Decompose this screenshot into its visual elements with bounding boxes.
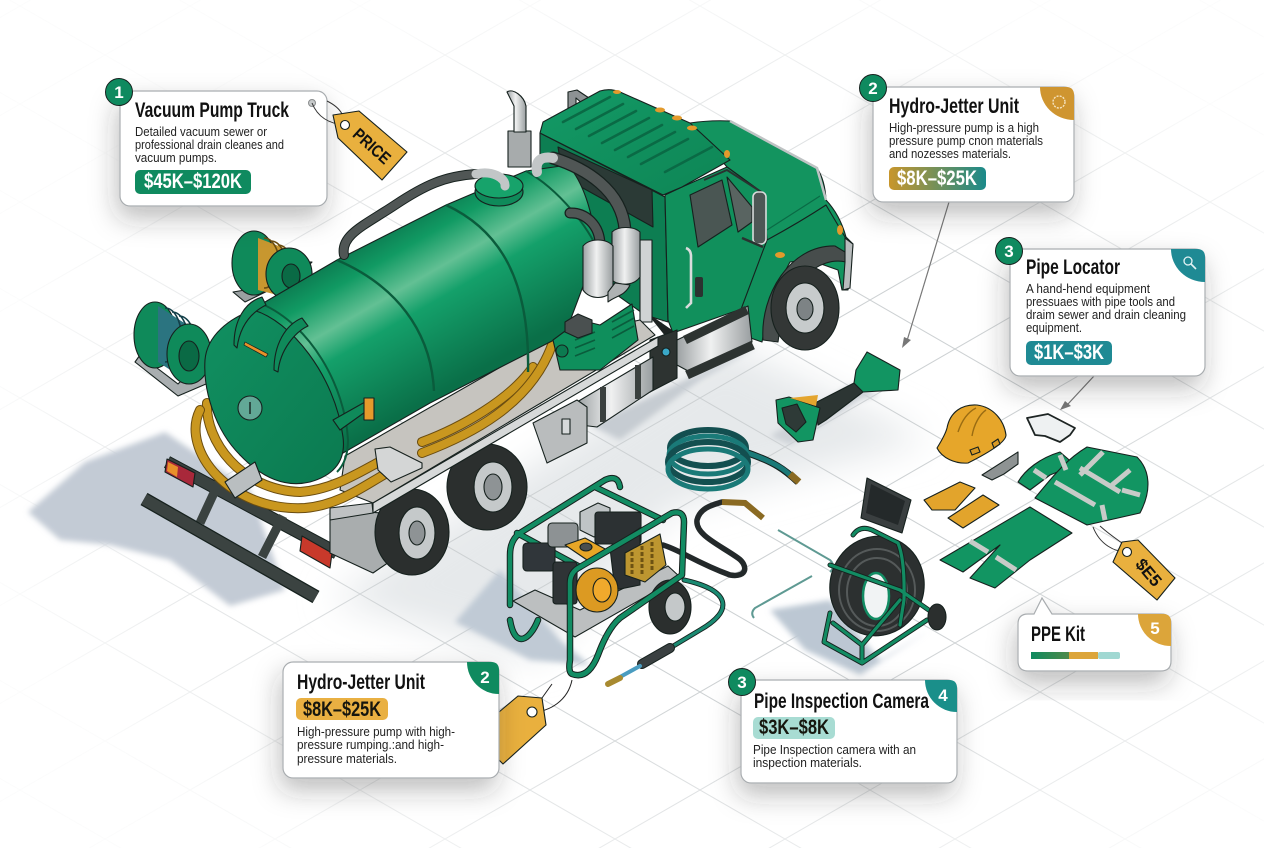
PPE items [924,405,1148,588]
camera wheel [928,604,946,630]
rear dome [205,310,343,484]
description [889,120,1043,161]
card body with pointer [1018,598,1171,671]
dome clamps [234,297,308,372]
nozzle fitting [722,502,763,518]
work pants [940,507,1072,588]
description [1026,281,1186,335]
goggles [982,452,1018,480]
description: inspection materials. [753,755,862,770]
corner tab with number [467,662,499,694]
gauge [238,396,262,420]
description: pressure materials. [297,751,397,766]
number badge [996,238,1022,264]
camera cable reel [819,526,935,646]
callout: Hydro-Jetter Unit (bottom) [283,662,499,778]
number badge: 2 [868,79,878,98]
hard hat [937,405,1006,463]
manhole [475,174,523,206]
card body [1010,249,1205,376]
side mirror [753,192,766,244]
corner tab with number: 4 [938,686,948,705]
corner tab with icon [1171,249,1205,282]
price tag: $E5 [1093,526,1175,600]
heading: Hydro-Jetter Unit [889,95,1019,118]
vacuum tank [205,165,597,498]
lower fender [740,205,846,342]
camera monitor [861,478,911,533]
hi-vis jacket [1018,447,1148,525]
card body [120,91,327,206]
description: High-pressure pump is a high [889,120,1039,135]
description [297,724,455,766]
callout: PPE Kit [1018,598,1171,671]
door handle and rail [686,248,691,308]
heading: PPE Kit [1031,623,1085,646]
number badge: 1 [114,83,124,102]
description: Detailed vacuum sewer or [135,124,268,139]
number badge [860,74,886,102]
side clamp [333,402,368,430]
price pill: $8K–$25K [897,167,977,190]
cab side panel with window [540,133,668,322]
number badge: 3 [1004,242,1014,261]
price tag: PRICE: PRICE [349,125,394,168]
description: High-pressure pump with high- [297,724,455,739]
description: and nozesses materials. [889,146,1011,161]
callout: Vacuum Pump Truck [106,78,327,206]
price tag: $E5: $E5 [1131,555,1165,590]
jetter engine [523,503,666,612]
price tag: PRICE [308,100,407,180]
jetter base plate [513,566,680,637]
chassis, steps and fuel tanks [533,240,753,463]
front wheel [771,266,839,350]
description: professional drain cleanes and [135,137,284,152]
door windows [690,180,732,247]
arrow: Pipe Locator to PPE [1060,376,1094,410]
hatch plate [375,447,422,482]
filter stand [640,240,652,322]
segmented bar [1031,652,1120,659]
corner tab with number: 2 [480,668,490,687]
price tag: jetter [499,680,572,764]
description: pressure pump cnon materials [889,133,1043,148]
description [135,124,284,165]
dark vacuum hoses [344,158,625,255]
ground shadows [28,345,930,675]
rear storage box [330,510,392,573]
pressure hose and lance [608,580,723,684]
gloves [924,482,999,528]
heading: Pipe Locator [1026,256,1120,279]
description: Pipe Inspection camera with an [753,742,916,757]
exhaust stack [507,91,531,167]
filter canisters [583,228,640,302]
jetter rear tube frame [510,478,663,639]
description: pressure rumping.:and high- [297,737,444,752]
heading: Pipe Inspection Camera [754,690,929,713]
heading: Hydro-Jetter Unit [297,671,425,694]
roof marker lights [613,90,843,258]
price pill: $3K–$8K [759,716,829,739]
cab door side [665,167,767,333]
corner tab with icon [1040,87,1074,120]
card body [741,680,957,783]
number badge [106,78,132,106]
arrow: Hydro-Jetter to locator [902,202,949,348]
vacuum pump truck illustration [134,90,853,597]
callout: Hydro-Jetter Unit (top) [860,74,1074,202]
tank bands [337,260,434,391]
description: equipment. [1026,320,1082,335]
callout: Pipe Locator [996,238,1205,376]
number badge: 3 [737,673,747,692]
pipe locator [776,352,900,442]
corner tab with number [1138,614,1171,646]
description: draim sewer and drain cleaning [1026,307,1186,322]
heading: Vacuum Pump Truck [135,99,289,122]
rear outlet [225,462,262,498]
deck [330,320,658,520]
rear bumper frame [144,459,337,597]
description [753,742,916,770]
cab [540,90,853,342]
exhaust bracket behind roof [568,90,592,110]
jetter front tube frame [569,512,684,675]
teal flow arrows [752,530,833,618]
description: vacuum pumps. [135,150,217,165]
hose reel: teal [134,302,211,396]
rear wheels [375,444,527,575]
description: A hand-hend equipment [1026,281,1150,296]
card body [873,87,1074,202]
callout: Pipe Inspection Camera [728,668,957,783]
price pill: $45K–$120K [144,170,242,193]
card body [283,662,499,778]
number badge [728,668,756,696]
black hose [663,502,745,575]
hood [690,121,853,290]
roof panel with vents [540,90,730,195]
hydro-jetter machine [510,478,763,684]
corner tab with number: 5 [1150,619,1160,638]
gold vacuum hose [196,345,552,508]
jetter wheel [649,580,691,634]
hose reel: gold [232,231,312,302]
coiled teal hose [668,430,799,489]
camera frame [824,528,933,663]
price pill: $1K–$3K [1034,341,1104,364]
description: pressuaes with pipe tools and [1026,294,1175,309]
vacuum pump [553,304,638,370]
price pill: $8K–$25K [303,698,381,721]
pipe inspection camera [819,478,946,663]
safety glasses [1027,414,1075,442]
corner tab with number [925,680,957,712]
